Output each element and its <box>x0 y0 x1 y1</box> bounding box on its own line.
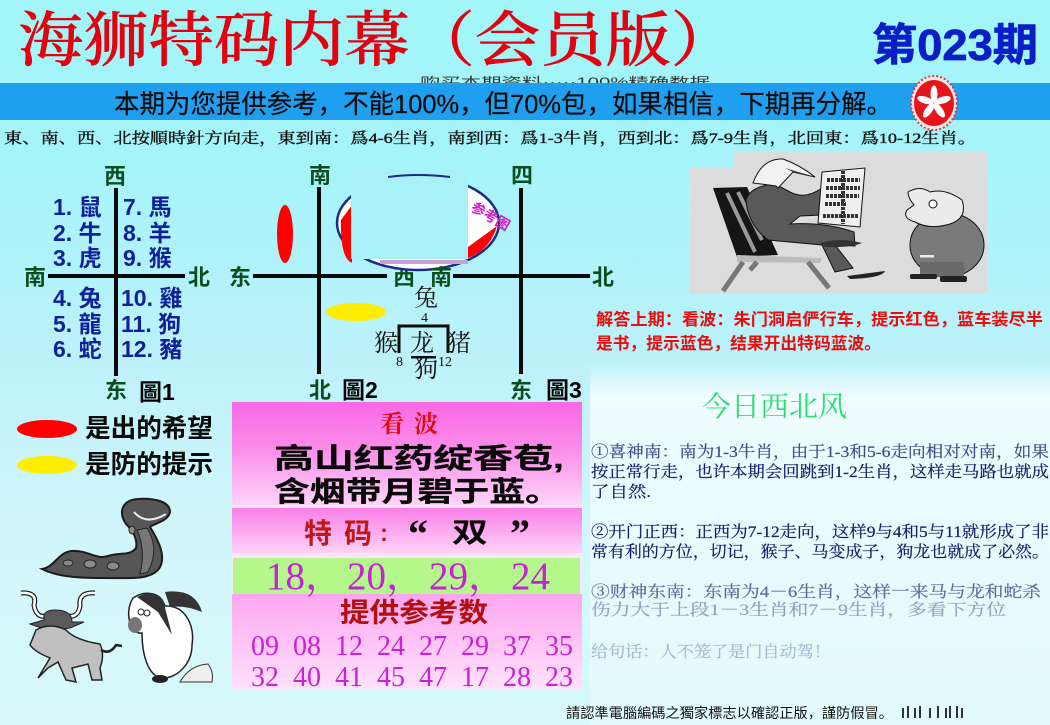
zodiac list: 7. 馬 <box>123 194 172 220</box>
reference numbers: 32 <box>251 662 279 693</box>
zodiac square: 4 <box>421 311 428 326</box>
diagram 2: directions: 东 <box>229 265 251 290</box>
pig <box>906 188 984 282</box>
zodiac square: 12 <box>438 355 452 370</box>
poem verse: 含烟带月碧于蓝。 <box>274 476 561 507</box>
panel: poem: : <box>380 520 388 547</box>
figure label 3: 圖3 <box>546 377 582 403</box>
diagram 3: directions: 南 <box>430 265 452 290</box>
title: 海狮特码内幕（会员版） <box>18 8 736 74</box>
icon: snake <box>42 499 170 578</box>
reference numbers: 24 <box>377 631 405 662</box>
diagram 2: directions: 北 <box>309 378 331 403</box>
icon: Hong Kong emblem <box>911 76 957 130</box>
panel: poem: 20， <box>347 555 425 598</box>
reference numbers: 40 <box>293 662 321 693</box>
stamp oval <box>337 170 513 270</box>
text block: analysis: 伤力大于上段1－3生肖和7－9生肖，多看下方位 <box>591 601 1006 619</box>
bird reading newspaper <box>713 159 885 291</box>
text block: analysis: ②开门正西：正西为7-12走向，这样9与4和5与11就形成了非 <box>591 523 1049 541</box>
text block: analysis: 按正常行走，也许本期会回跳到1-2生肖，这样走马路也就成 <box>591 462 1049 481</box>
reference numbers: 45 <box>377 662 405 693</box>
legend: 是防的提示 <box>85 450 213 479</box>
zodiac list: 4. 兔 <box>53 285 102 311</box>
zodiac list: 3. 虎 <box>53 245 102 271</box>
diagram 2: directions: 南 <box>309 163 331 188</box>
zodiac square: 8 <box>396 355 403 370</box>
zodiac list: 5. 龍 <box>53 311 102 337</box>
text block: analysis: ①喜神南：南为1-3牛肖，由于1-3和5-6走向相对对南，如果 <box>591 443 1049 461</box>
panel: poem: ” <box>510 511 530 556</box>
stamp oval: 参考图 <box>468 199 513 234</box>
blue band <box>0 83 1050 120</box>
text block: analysis: 了自然. <box>591 483 651 501</box>
previous answer: 解答上期：看波：朱门洞启俨行车，提示红色，蓝车装尽半 <box>596 309 1043 329</box>
diagram 1: zodiac compass: 西 <box>104 164 126 189</box>
zodiac square <box>374 285 471 383</box>
zodiac square: 猪 <box>447 330 471 357</box>
reference numbers: 47 <box>419 662 447 693</box>
barcode mark <box>903 706 962 718</box>
diagram 3: directions: 四 <box>511 163 533 188</box>
poem verse <box>274 443 564 507</box>
diagram 1: zodiac compass <box>24 164 210 405</box>
band message: 本期为您提供参考，不能100%，但70%包，如果相信，下期再分解。 <box>114 89 892 119</box>
yellow oval <box>326 303 386 321</box>
poem title: 看波 <box>380 411 448 438</box>
zodiac list: 10. 雞 <box>121 285 182 311</box>
diagram 1: zodiac compass: 北 <box>188 265 210 290</box>
panel: poem: 29， <box>429 555 507 598</box>
panel: poem: 双 <box>452 517 488 548</box>
green number strip <box>233 558 580 594</box>
cartoon panel <box>690 152 987 293</box>
zodiac square: 猴 <box>374 330 398 357</box>
zodiac list: 12. 豬 <box>121 336 182 362</box>
poem verse: 高山红药绽香苞, <box>274 443 564 474</box>
diagram 3: directions: 东 <box>510 378 532 403</box>
text block: analysis: 常有利的方位，切记，猴子、马变成子，狗龙也就成了必然。 <box>591 542 1049 561</box>
reference numbers <box>251 631 573 693</box>
diagram 3: directions: 北 <box>592 265 614 290</box>
reference numbers: 09 <box>251 631 279 662</box>
zodiac square: 龙 <box>410 330 434 357</box>
zodiac list: 6. 蛇 <box>53 336 102 362</box>
panel: poem: “ <box>408 511 428 556</box>
reference heading: 提供参考数 <box>340 598 488 628</box>
zodiac list: 1. 鼠 <box>53 194 102 220</box>
text block: analysis <box>591 443 1049 661</box>
panel: poem <box>232 402 582 693</box>
direction rule text: 東、南、西、北按順時針方向走，東到南：爲4-6生肖，南到西：爲1-3牛肖，西到北：爲7-9生肖，北回東：爲10-12生肖。 <box>4 130 976 147</box>
white right panel <box>590 362 1050 725</box>
zodiac list: 11. 狗 <box>121 311 181 337</box>
reference numbers: 28 <box>503 662 531 693</box>
panel: poem: 18， <box>266 555 344 598</box>
figure label 2: 圖2 <box>342 377 378 403</box>
footer note: 請認準電腦編碼之獨家標志以確認正版，謹防假冒。 <box>566 705 893 721</box>
reference numbers: 17 <box>461 662 489 693</box>
reference numbers: 35 <box>545 631 573 662</box>
reference numbers: 12 <box>335 631 363 662</box>
diagram 2: directions <box>229 163 415 403</box>
wind heading: 今日西北风 <box>702 391 847 423</box>
zodiac list <box>53 194 182 362</box>
icon: bull <box>21 593 122 682</box>
zodiac list: 2. 牛 <box>53 220 102 246</box>
figure label 1: 圖1 <box>139 379 175 405</box>
zodiac list: 8. 羊 <box>123 220 172 246</box>
zodiac list: 9. 猴 <box>123 245 172 271</box>
previous answer: 是书，提示蓝色，结果开出特码蓝波。 <box>596 333 881 353</box>
red oval <box>277 205 293 263</box>
reference numbers: 41 <box>335 662 363 693</box>
diagram 3: directions <box>430 163 614 403</box>
issue number: 第023期 <box>872 21 1038 70</box>
legend: 是出的希望 <box>85 414 213 443</box>
reference numbers: 29 <box>461 631 489 662</box>
diagram 1: zodiac compass: 南 <box>24 265 46 290</box>
reference numbers: 23 <box>545 662 573 693</box>
reference numbers: 37 <box>503 631 531 662</box>
reference numbers: 08 <box>293 631 321 662</box>
zodiac square: 兔 <box>414 285 438 312</box>
text block: analysis: ③财神东南：东南为4－6生肖，这样一来马与龙和蛇杀 <box>591 583 1041 601</box>
zodiac square: 狗 <box>414 356 438 383</box>
legend <box>17 414 213 479</box>
reference numbers: 27 <box>419 631 447 662</box>
diagram 2: directions: 西 <box>393 265 415 290</box>
text block: analysis: 给句话：人不笼了是门自动驾！ <box>591 643 831 661</box>
clipped text above band: 购买本期资料·····100%精确数据 <box>420 74 710 89</box>
icon: horse <box>128 591 212 683</box>
panel: poem: 24 <box>511 555 550 598</box>
diagram 1: zodiac compass: 东 <box>105 378 127 403</box>
previous answer <box>596 309 1043 353</box>
special code: 特码 <box>304 518 372 549</box>
